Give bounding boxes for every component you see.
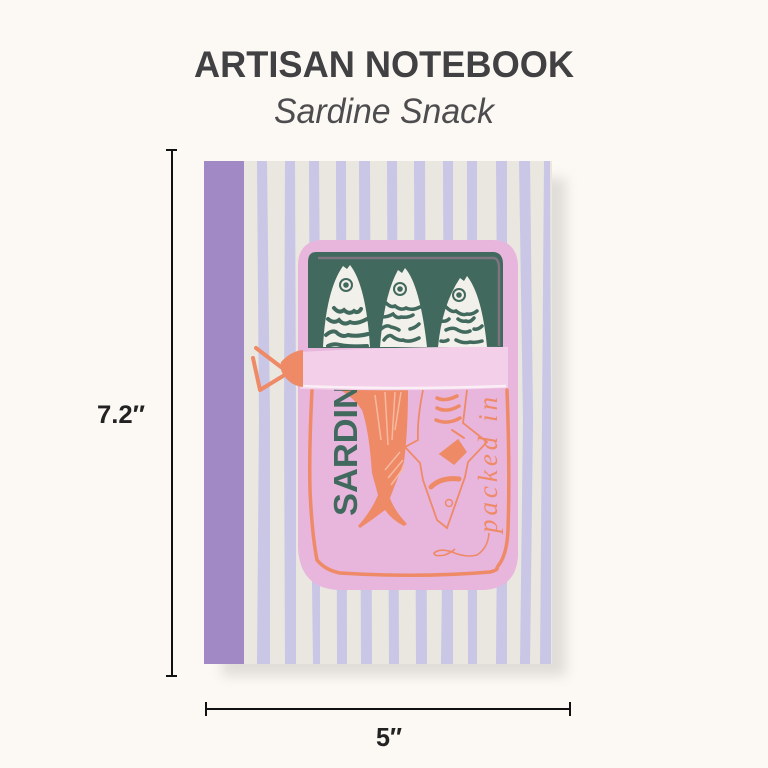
sardine head 1 [323, 265, 370, 347]
can key [253, 348, 303, 390]
notebook cover [204, 161, 552, 664]
notebook [204, 161, 552, 664]
subtitle: Sardine Snack [274, 92, 495, 131]
orange fish two [405, 390, 487, 528]
book shadow [222, 178, 566, 676]
sardine heads [323, 265, 487, 347]
window inner rim [318, 258, 499, 346]
sardine head 2 [380, 268, 427, 347]
script flourish [434, 533, 489, 556]
tin body [298, 240, 518, 590]
orange fish one [340, 390, 408, 528]
cover stripes [257, 161, 551, 664]
tin label text: SARDIN [327, 384, 364, 516]
height label: 7.2″ [97, 401, 145, 429]
spine [204, 161, 244, 664]
height dimension arrow [166, 150, 177, 676]
title: ARTISAN NOTEBOOK [194, 44, 574, 85]
tin can [253, 240, 518, 590]
tin window [308, 252, 503, 348]
lid band [300, 347, 508, 390]
width dimension arrow [206, 702, 570, 716]
orange inner border [310, 390, 509, 575]
sardine head 3 [438, 276, 487, 347]
width label: 5″ [376, 722, 402, 752]
packed in script: packed in [473, 397, 503, 535]
